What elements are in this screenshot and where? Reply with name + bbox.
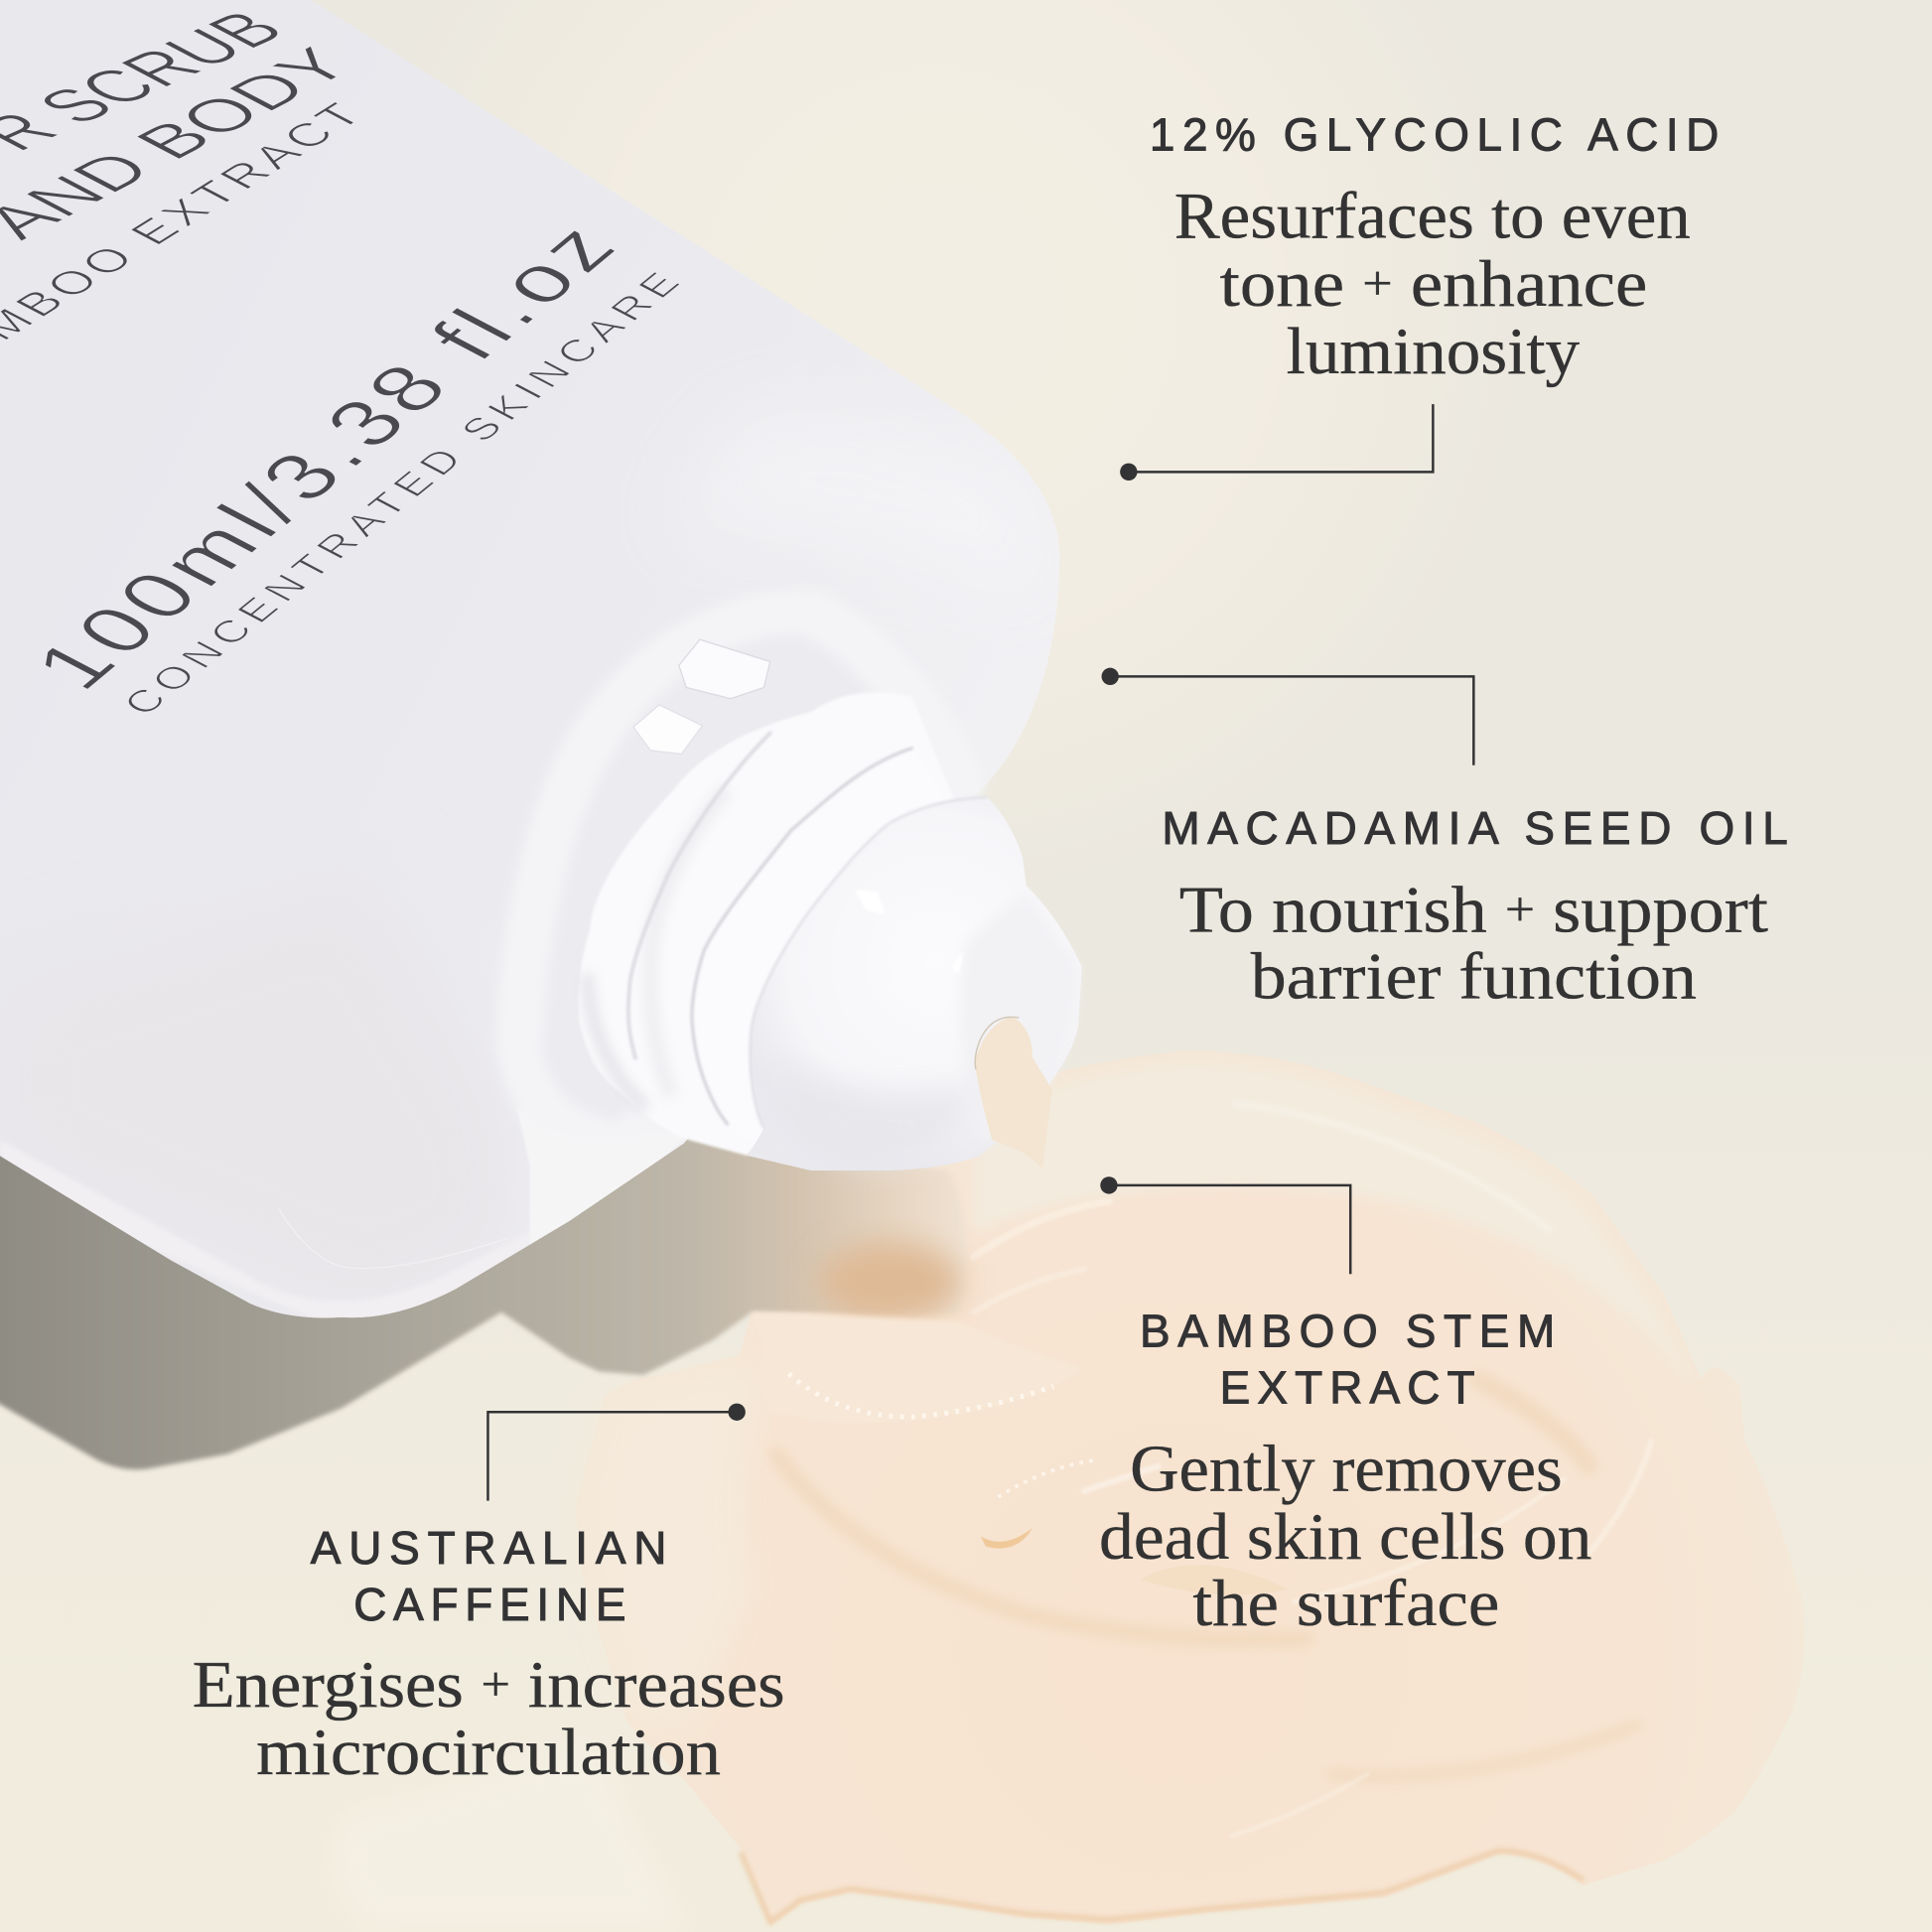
nozzle glints xyxy=(855,890,964,973)
faint cream splash, lower left xyxy=(332,1737,690,1932)
recessed shade xyxy=(542,634,936,1121)
callout: macadamia seed oil: barrier function xyxy=(1251,939,1697,1013)
collar lower shade xyxy=(587,973,647,1109)
glossy highlights xyxy=(973,1201,1651,1836)
bottle cast shadow xyxy=(0,1134,967,1469)
callout: australian caffeine: microcirculation xyxy=(256,1716,721,1789)
nozzle xyxy=(748,797,1082,1171)
pale left lobe xyxy=(579,1368,763,1725)
callout: australian caffeine: AUSTRALIAN xyxy=(311,1522,666,1574)
peach glow in the shadow xyxy=(818,1242,961,1320)
callout: glycolic acid: luminosity xyxy=(1287,315,1581,388)
translucent upper rim xyxy=(973,1062,1694,1386)
shoulder highlight xyxy=(522,1124,664,1245)
callout: macadamia seed oil: MACADAMIA SEED OIL xyxy=(1162,802,1788,854)
bottle xyxy=(0,0,1082,1343)
bottle label text xyxy=(0,1,689,721)
volume: 100ml/3.38 fl.oz xyxy=(14,212,635,703)
product fold xyxy=(752,1312,1097,1497)
callout: glycolic acid: tone + enhance xyxy=(1220,247,1647,321)
callout: bamboo stem extract: the surface xyxy=(1192,1567,1499,1640)
groove one xyxy=(628,732,771,1059)
callout: macadamia seed oil: To nourish + support xyxy=(1179,873,1768,946)
moulded base line xyxy=(278,1208,507,1268)
callout: glycolic acid: 12% GLYCOLIC ACID xyxy=(1150,108,1719,160)
callout: bamboo stem extract xyxy=(1099,1176,1591,1640)
callout: australian caffeine: CAFFEINE xyxy=(353,1579,625,1630)
collar xyxy=(578,692,980,1156)
bottle body xyxy=(0,0,1059,1317)
callout: australian caffeine xyxy=(193,1404,785,1789)
callout: bamboo stem extract: BAMBOO STEM xyxy=(1140,1305,1555,1356)
concentrated skincare: CONCENTRATED SKINCARE xyxy=(113,266,689,721)
nozzle tip face xyxy=(960,894,1078,1146)
orange bottom edge xyxy=(741,1851,1584,1922)
swatch base shape xyxy=(576,1049,1804,1927)
dispensed product xyxy=(975,1017,1052,1169)
callout: glycolic acid xyxy=(1120,108,1719,481)
outer bright ring xyxy=(496,590,986,1141)
callout: glycolic acid: Resurfaces to even xyxy=(1174,180,1691,253)
glitter xyxy=(788,1374,1053,1417)
callout: bamboo stem extract: dead skin cells on xyxy=(1099,1500,1591,1574)
warm light beside the bottle xyxy=(0,0,1601,936)
callout: bamboo stem extract: Gently removes xyxy=(1130,1433,1563,1506)
product swatch xyxy=(576,1049,1804,1927)
callout: bamboo stem extract: EXTRACT xyxy=(1220,1362,1475,1414)
pale ripple in the rim xyxy=(1232,1103,1553,1232)
ring two xyxy=(692,748,986,1152)
callout: macadamia seed oil xyxy=(1102,668,1788,1013)
nozzle edge line xyxy=(750,797,987,1129)
lilac lower body xyxy=(25,1172,55,1189)
hole edge xyxy=(975,1017,1019,1069)
arc shading xyxy=(776,1380,1639,1776)
base rim xyxy=(0,1156,529,1318)
callout: australian caffeine: Energises + increases xyxy=(193,1648,785,1722)
groove two xyxy=(692,748,913,1125)
lugs xyxy=(679,639,770,699)
collar band shade xyxy=(650,788,727,1097)
nozzle under shadow xyxy=(770,1059,973,1165)
upper shoulder xyxy=(665,413,1047,617)
small peach pits xyxy=(981,1528,1033,1549)
neck collar rings xyxy=(496,590,986,1156)
